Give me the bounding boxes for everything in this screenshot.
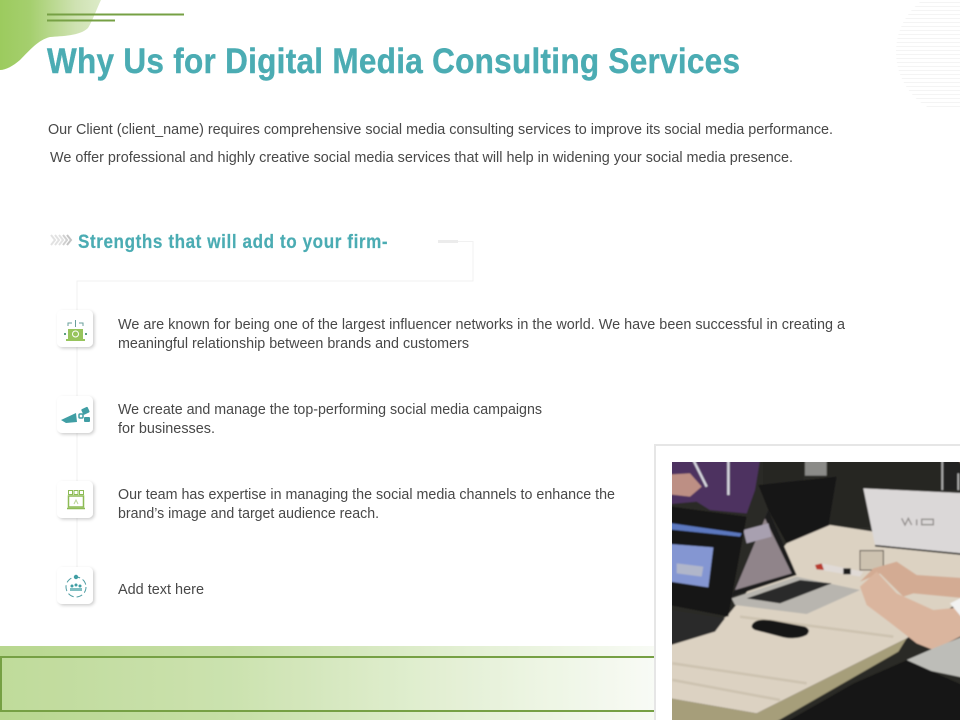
list item 4 (57, 567, 204, 604)
list item 1 (57, 310, 846, 352)
phone (752, 620, 809, 638)
item 1 text (118, 317, 846, 352)
icon: chevrons (51, 235, 71, 245)
photo card frame (654, 444, 960, 720)
icon: laptop network (57, 310, 93, 347)
intro text block: Our Client (client_name) requires comprehensive social media consulting services to improve its social media performance. (48, 122, 833, 138)
list item 2 (57, 396, 542, 437)
icon: media screen (57, 481, 93, 518)
item 2 text (118, 402, 542, 437)
photo: team meeting with laptops (660, 450, 960, 720)
intro text block: We offer professional and highly creative social media services that will help in widening your social media presence. (50, 150, 793, 166)
strengths heading: Strengths that will add to your firm- (78, 231, 388, 252)
item 3 text: Our team has expertise in managing the social media channels to enhance the (118, 487, 615, 503)
arms and hands (860, 562, 960, 598)
title: Why Us for Digital Media Consulting Services (47, 43, 740, 81)
table (660, 525, 960, 713)
sony laptop (863, 488, 960, 554)
item 3 text: brand’s image and target audience reach. (118, 506, 379, 522)
shirt and chair (907, 635, 960, 678)
item 2 text: for businesses. (118, 421, 215, 437)
item 4 text: Add text here (118, 582, 204, 598)
connector line (77, 242, 473, 570)
icon: megaphone (57, 396, 93, 433)
bottom green band (0, 646, 656, 720)
item 2 text: We create and manage the top-performing social media campaigns (118, 402, 542, 418)
item 1 text: meaningful relationship between brands and customers (118, 336, 469, 352)
asus bag (758, 477, 837, 543)
item 1 text: We are known for being one of the largest influencer networks in the world. We have been successful in creating a (118, 317, 846, 333)
list item 3 (57, 481, 615, 522)
purple person (672, 462, 760, 514)
decorative striped circle (896, 2, 960, 107)
macbook (732, 510, 797, 597)
item 3 text (118, 487, 615, 522)
decorative green blob with header lines (0, 0, 184, 70)
marker and note (822, 564, 863, 576)
black laptop (672, 506, 746, 618)
intro text block (48, 122, 833, 166)
icon: team circle (57, 567, 93, 604)
